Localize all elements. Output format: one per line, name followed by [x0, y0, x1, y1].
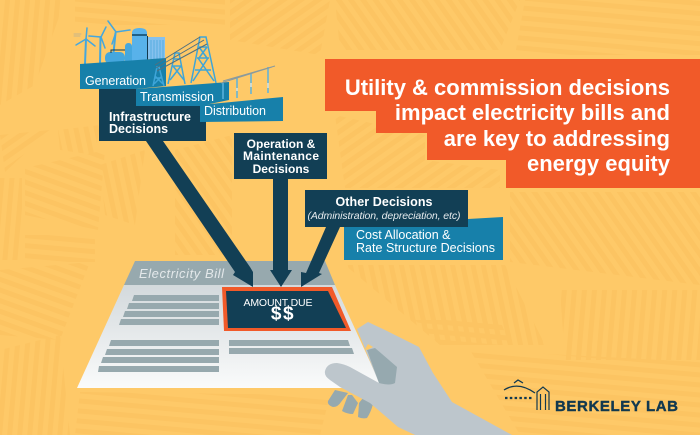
bill header band: Electricity Bill	[139, 266, 225, 281]
bill sheet	[77, 285, 382, 388]
icon: transmission towers	[153, 37, 216, 86]
bill line items lower left	[98, 340, 219, 372]
icon: power plant buildings	[105, 28, 165, 64]
panel: generation ribbon	[80, 58, 166, 89]
panel: operation and maintenance decisions: Maintenance	[243, 149, 319, 163]
panel: operation and maintenance decisions	[234, 133, 327, 179]
panel: other decisions: (Administration, depreciation, etc)	[308, 210, 460, 222]
icon: dome and campanile	[504, 380, 549, 410]
arrow: other decisions to amount due	[301, 227, 340, 287]
panel: headline	[325, 59, 700, 188]
panel: generation ribbon: Generation	[85, 74, 146, 88]
title: impact electricity bills and	[395, 100, 670, 125]
panel: infrastructure decisions: Infrastructure	[109, 110, 191, 124]
bill header band	[124, 261, 335, 285]
icon: wind turbines	[74, 21, 130, 64]
panel: transmission ribbon: Transmission	[140, 90, 214, 104]
bill line items upper left	[119, 295, 219, 325]
panel: other decisions: Other Decisions	[336, 195, 433, 209]
panel: operation and maintenance decisions: Decisions	[253, 162, 310, 176]
amount due box: AMOUNT DUE	[244, 297, 312, 309]
panel: cost allocation and rate structure decisions: Cost Allocation &	[356, 228, 451, 242]
title: are key to addressing	[444, 126, 670, 151]
arrow: infrastructure to amount due	[146, 141, 253, 287]
panel: cost allocation and rate structure decisions: Rate Structure Decisions	[356, 241, 495, 255]
gap between thumb and palm	[365, 344, 373, 350]
arrow: operation to amount due	[270, 179, 292, 287]
hand holding the bill	[325, 322, 512, 435]
panel: distribution ribbon	[200, 97, 283, 122]
amount due box	[222, 287, 351, 331]
back fingers	[328, 390, 373, 418]
palm and fingers	[325, 322, 512, 435]
panel: other decisions	[305, 190, 468, 227]
amount due box: $$	[271, 304, 295, 324]
title: Utility & commission decisions	[345, 75, 670, 100]
panel: transmission ribbon	[136, 82, 229, 106]
panel: infrastructure decisions	[99, 89, 206, 141]
panel: operation and maintenance decisions: Operation &	[247, 137, 316, 151]
bill line items right	[229, 340, 354, 354]
logo: Berkeley Lab: BERKELEY LAB	[555, 398, 678, 415]
icon: distribution poles	[221, 66, 275, 99]
logo: Berkeley Lab	[504, 380, 678, 415]
panel: electricity bill paper	[77, 261, 382, 388]
panel: cost allocation and rate structure decisions	[344, 217, 503, 260]
panel: distribution ribbon: Distribution	[204, 104, 266, 118]
inner palm shadow	[367, 348, 397, 384]
title: energy equity	[527, 151, 671, 176]
title	[345, 75, 671, 176]
panel: infrastructure decisions: Decisions	[109, 122, 168, 136]
